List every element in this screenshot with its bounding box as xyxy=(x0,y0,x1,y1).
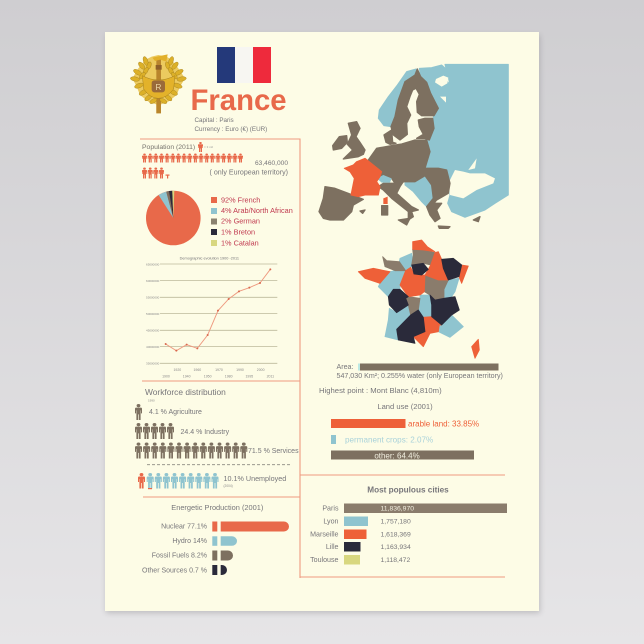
panel: population: 63,460,000 xyxy=(255,160,288,167)
panel: most populous cities: Most populous cities xyxy=(367,486,449,494)
capital and currency: Currency : Euro (€) (EUR) xyxy=(194,126,267,133)
fossil fuels bar xyxy=(212,550,233,560)
panel: population: Population (2011) xyxy=(142,144,195,151)
land use: arable land: arable land: 33.85% xyxy=(408,420,479,428)
title: France xyxy=(190,84,287,117)
panel: most populous cities: Lille xyxy=(326,543,339,551)
line chart: demographic evolution: 35000000 xyxy=(146,362,160,366)
line chart: demographic evolution: 1920 xyxy=(173,368,181,372)
panel: energetic production xyxy=(142,503,289,575)
panel dividers xyxy=(140,139,505,578)
land use heading: Land use (2001) xyxy=(377,402,433,411)
unemployed row: (2004) xyxy=(224,484,233,488)
line chart: demographic evolution: 1950 xyxy=(204,375,212,379)
line chart: demographic evolution: 40000000 xyxy=(146,345,160,349)
line chart: demographic evolution: 1995 xyxy=(245,375,253,379)
panel: population: = 3 mil xyxy=(204,145,213,149)
panel: most populous cities: 11,836,970 xyxy=(380,506,414,512)
panel: population: ( only European territory) xyxy=(210,168,288,176)
panel: most populous cities: Lyon xyxy=(323,518,339,526)
other sources bar xyxy=(212,565,227,575)
agriculture row: 4.1 % Agriculture xyxy=(149,409,202,416)
pie legend xyxy=(211,196,293,248)
line chart: demographic evolution: 1980 xyxy=(225,375,233,379)
highest point: Highest point : Mont Blanc (4,810m) xyxy=(319,386,442,395)
pie legend: 92% French xyxy=(221,196,260,204)
panel: workforce distribution xyxy=(135,387,299,489)
poster sheet xyxy=(105,32,539,611)
panel: most populous cities xyxy=(310,486,507,564)
line chart: demographic evolution: 1970 xyxy=(215,368,223,372)
industry row xyxy=(135,423,230,439)
agriculture row xyxy=(135,404,202,420)
line chart: demographic evolution: 65000000 xyxy=(146,262,160,266)
capital and currency xyxy=(194,117,267,133)
line chart: demographic evolution xyxy=(146,256,277,379)
line chart: demographic evolution: Demographic evolution 1900 -2011 xyxy=(180,256,239,260)
France highlighted xyxy=(344,158,382,197)
pie legend: 4% Arab/North African xyxy=(221,206,293,215)
panel: population xyxy=(142,142,288,178)
unemployed row xyxy=(138,473,286,489)
line chart: demographic evolution: 1960 xyxy=(193,368,201,372)
panel: energetic production: Energetic Production (2001) xyxy=(171,503,263,512)
panel: most populous cities: 1,757,180 xyxy=(380,518,411,526)
line chart: demographic evolution: 2011 xyxy=(267,375,274,379)
panel: workforce distribution: Workforce distribution xyxy=(145,387,226,397)
panel: energetic production: Hydro 14% xyxy=(172,538,207,545)
hydro bar xyxy=(212,536,237,546)
pie legend: 1% Breton xyxy=(221,228,255,236)
unemployed row: 10.1% Unemployed xyxy=(224,474,286,483)
icon: coat of arms xyxy=(130,54,187,113)
panel: energetic production: Nuclear 77.1% xyxy=(161,524,207,530)
panel: most populous cities: 1,118,472 xyxy=(380,557,410,564)
Switzerland xyxy=(377,175,392,183)
line chart: demographic evolution: 1990 xyxy=(236,368,244,372)
land use: other: other: 64.4% xyxy=(374,451,420,460)
land use: permanent crops: permanent crops: 2.07% xyxy=(345,436,433,444)
panel: energetic production: Fossil Fuels 8.2% xyxy=(152,552,207,560)
capital and currency: Capital : Paris xyxy=(194,117,234,124)
land use: arable land xyxy=(331,419,479,428)
panel: workforce distribution: 1990 xyxy=(148,398,155,402)
panel: energetic production: Other Sources 0.7 % xyxy=(142,568,207,574)
services row xyxy=(135,442,299,458)
nuclear bar xyxy=(212,522,289,532)
line chart: demographic evolution: 1940 xyxy=(183,375,191,379)
icon: coat of arms: R xyxy=(155,82,161,92)
area block: Area: xyxy=(336,363,353,371)
services row: 71.5 % Services xyxy=(248,448,299,455)
pie chart: ethnic groups xyxy=(146,191,201,245)
area block: 547,030 Km²; 0.255% water (only European territory) xyxy=(336,372,503,380)
map: Europe xyxy=(319,64,508,228)
panel: most populous cities: Marseille xyxy=(310,530,339,538)
industry row: 24.4 % Industry xyxy=(180,429,230,436)
area block xyxy=(336,363,503,380)
panel: most populous cities: 1,618,369 xyxy=(380,532,411,538)
pie legend: 2% German xyxy=(221,216,260,226)
land use: other xyxy=(331,450,474,460)
panel: most populous cities: Paris xyxy=(322,504,339,512)
panel: most populous cities: Toulouse xyxy=(310,556,339,564)
line chart: demographic evolution: 50000000 xyxy=(146,312,160,316)
line chart: demographic evolution: 45000000 xyxy=(146,329,160,333)
pie legend: 1% Catalan xyxy=(221,238,259,248)
line chart: demographic evolution: 60000000 xyxy=(146,279,160,283)
Scandinavia and Finland xyxy=(391,69,438,140)
map: French regions xyxy=(358,240,479,358)
line chart: demographic evolution: 2000 xyxy=(257,368,265,372)
icon: French flag xyxy=(217,47,271,83)
line chart: demographic evolution: 1900 xyxy=(162,375,170,379)
panel: most populous cities: 1,163,934 xyxy=(380,544,411,551)
line chart: demographic evolution: 55000000 xyxy=(146,296,160,300)
